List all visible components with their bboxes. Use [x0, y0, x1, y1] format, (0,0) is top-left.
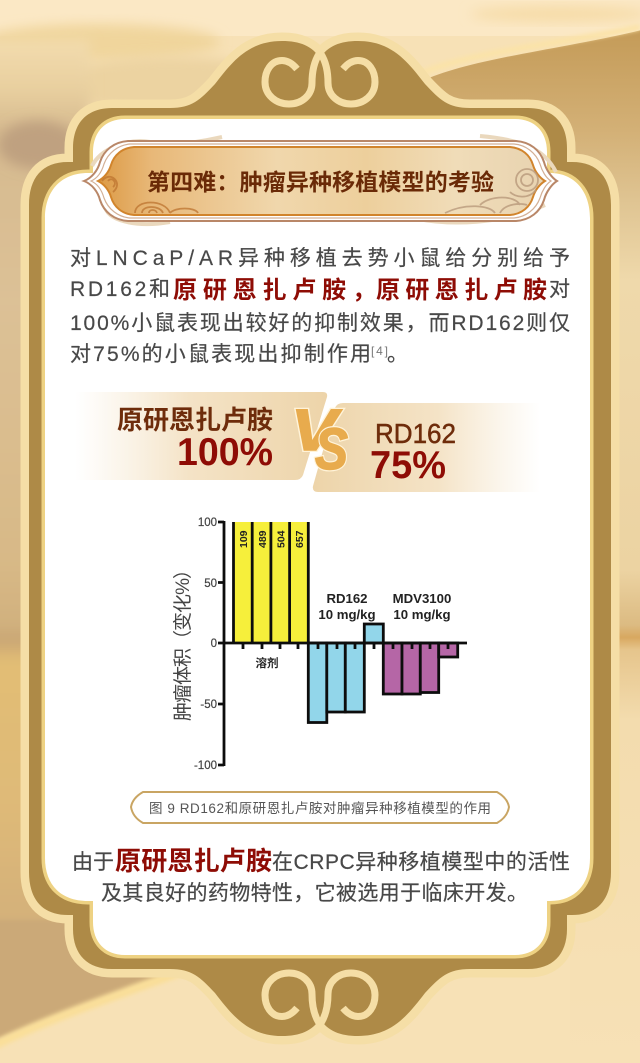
caption text: 图 9 RD162和原研恩扎卢胺对肿瘤异种移植模型的作用: [149, 800, 491, 816]
panel: left comparison ribbon: [75, 392, 327, 480]
intro paragraph: 原研恩扎卢胺: [376, 277, 547, 304]
conclusion paragraph: 由于: [72, 851, 114, 874]
intro paragraph: RD162和: [70, 278, 170, 301]
title banner: [84, 136, 557, 224]
icon: bottom right scroll: [321, 973, 375, 1023]
vehicle bars: [234, 522, 308, 643]
icon: bottom left scroll: [265, 973, 319, 1023]
bar value labels: 109: [238, 530, 250, 548]
panel: right comparison ribbon: [313, 403, 540, 492]
bar value labels: 504: [276, 530, 288, 548]
VS mark: S: [315, 417, 348, 482]
banner second outline: [91, 144, 551, 218]
panel: white content card: [45, 119, 590, 955]
group labels: MDV3100: [393, 591, 451, 606]
y axis tick labels: 50: [204, 578, 217, 590]
banner cloud swirls: [102, 177, 198, 213]
y axis tick labels: -50: [200, 699, 217, 711]
y axis tick labels: 0: [211, 638, 217, 650]
VS mark: [291, 398, 348, 482]
y axis tick labels: [194, 517, 217, 772]
group labels: RD162: [326, 591, 368, 606]
banner wisps: [92, 136, 556, 224]
intro paragraph: 对: [549, 278, 570, 301]
group labels: 溶剂: [256, 656, 278, 670]
conclusion paragraph: [72, 846, 570, 905]
y axis tick labels: 100: [198, 517, 217, 529]
banner parchment plate: [98, 147, 545, 215]
y axis title: 肿瘤体积（变化%）: [172, 560, 194, 721]
intro paragraph: 。: [387, 343, 408, 366]
bar chart: tumour volume change: [172, 517, 467, 772]
axes and ticks: [218, 521, 467, 766]
right value: 75%: [370, 444, 446, 487]
y axis tick labels: -100: [194, 760, 217, 772]
bar value labels: [238, 530, 306, 548]
left drug name: 原研恩扎卢胺: [117, 405, 273, 435]
figure caption: [131, 792, 509, 823]
group labels: 10 mg/kg: [318, 607, 376, 622]
intro paragraph: 对LNCaP/AR异种移植去势小鼠给分别给予: [70, 247, 570, 270]
intro paragraph: 对75%的小鼠表现出抑制作用: [70, 343, 371, 366]
banner cloud swirls right: [445, 169, 538, 213]
icon: top left scroll: [265, 54, 319, 104]
bar value labels: 489: [257, 530, 269, 548]
banner title text: 第四难：肿瘤异种移植模型的考验: [147, 169, 494, 195]
RD162 bars: [308, 624, 383, 722]
VS mark: V: [291, 398, 342, 463]
intro paragraph: [4]: [371, 344, 388, 358]
conclusion paragraph: 在CRPC异种移植模型中的活性: [272, 851, 570, 874]
group labels: [256, 591, 451, 670]
group labels: 10 mg/kg: [393, 607, 451, 622]
icon: top right scroll: [321, 54, 375, 104]
VS mark: S: [315, 417, 348, 482]
MDV3100 bars: [383, 643, 458, 694]
left value: 100%: [177, 431, 273, 474]
conclusion paragraph: 原研恩扎卢胺: [115, 846, 272, 876]
intro paragraph: [70, 247, 570, 366]
conclusion paragraph: 及其良好的药物特性，它被选用于临床开发。: [101, 882, 528, 905]
VS mark: V: [291, 398, 342, 463]
intro paragraph: 100%小鼠表现出较好的抑制效果，而RD162则仅: [70, 312, 570, 335]
comparison: drug A vs RD162: [75, 392, 540, 492]
bar value labels: 657: [294, 530, 306, 548]
right drug name: RD162: [375, 418, 456, 449]
intro paragraph: 原研恩扎卢胺，: [173, 277, 376, 304]
banner outer outline: [84, 141, 557, 221]
caption capsule: [131, 792, 509, 823]
